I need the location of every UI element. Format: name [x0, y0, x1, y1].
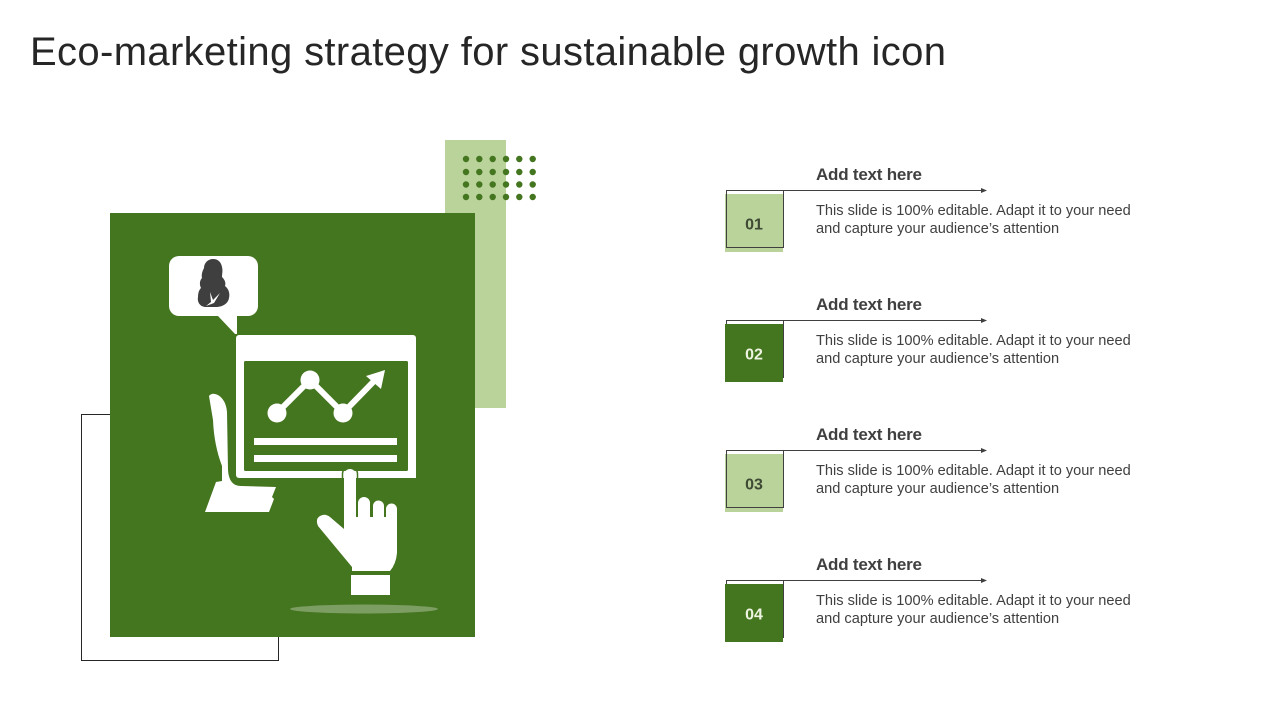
icon: monitor with growth chart [236, 335, 416, 478]
dot grid [463, 156, 536, 200]
number box 04: 04 [745, 606, 763, 624]
panel: item 01 [725, 165, 1131, 252]
body text 01: This slide is 100% editable. Adapt it to your need [816, 203, 1131, 219]
number box 03 [725, 448, 987, 512]
number box 04 [725, 578, 987, 642]
icon: speech bubble with tree [169, 256, 258, 334]
number box 01: 01 [745, 216, 763, 234]
number box 01 [725, 188, 987, 252]
panel: item 04 [725, 555, 1131, 642]
icon: pointing hand with cuff [317, 467, 397, 595]
number box 03: 03 [745, 476, 763, 494]
panel: light green back rectangle [445, 140, 506, 408]
panel: item 02 [725, 295, 1131, 382]
number box 02: 02 [745, 346, 763, 364]
panel: item 03 [725, 425, 1131, 512]
title: Eco-marketing strategy for sustainable growth icon [30, 30, 946, 74]
body text 04: and capture your audience’s attention [816, 611, 1059, 627]
heading 02: Add text here [816, 295, 922, 314]
body text 01: and capture your audience’s attention [816, 221, 1059, 237]
number box 02 [725, 318, 987, 382]
body text 03: and capture your audience’s attention [816, 481, 1059, 497]
icon: hand shadow [290, 604, 438, 614]
heading 03: Add text here [816, 425, 922, 444]
icon: left hand holding monitor [205, 394, 276, 512]
body text 04: This slide is 100% editable. Adapt it to your need [816, 593, 1131, 609]
icon: eco-marketing illustration [169, 256, 438, 614]
heading 04: Add text here [816, 555, 922, 574]
body text 02: This slide is 100% editable. Adapt it to your need [816, 333, 1131, 349]
outline frame behind main panel [82, 414, 278, 660]
panel: main green square [110, 213, 475, 637]
heading 01: Add text here [816, 165, 922, 184]
body text 02: and capture your audience’s attention [816, 351, 1059, 367]
body text 03: This slide is 100% editable. Adapt it to your need [816, 463, 1131, 479]
